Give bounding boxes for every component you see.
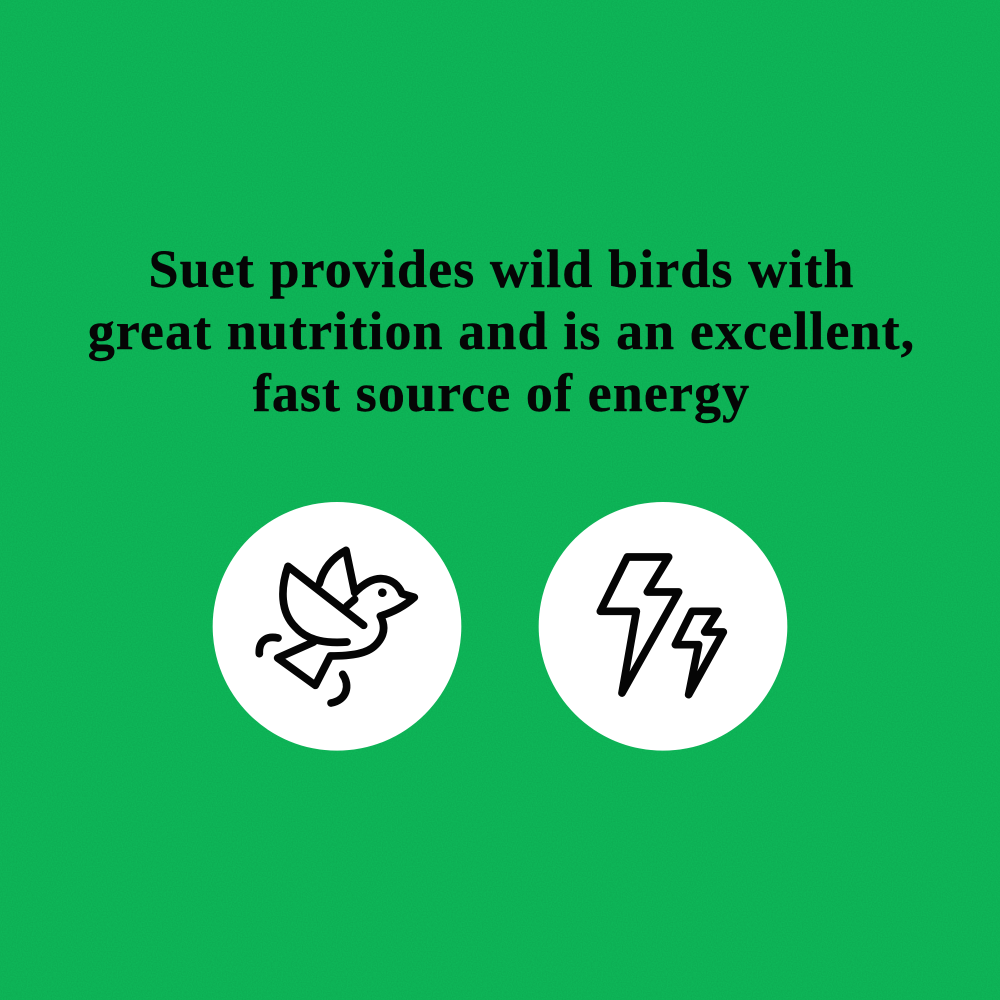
title: Suet provides wild birds with [148,239,855,299]
title: fast source of energy [253,363,750,423]
title [88,239,915,424]
icon: bird in white circle [212,502,462,751]
title: great nutrition and is an excellent, [88,301,915,361]
icon: lightning bolts in white circle [538,502,788,751]
